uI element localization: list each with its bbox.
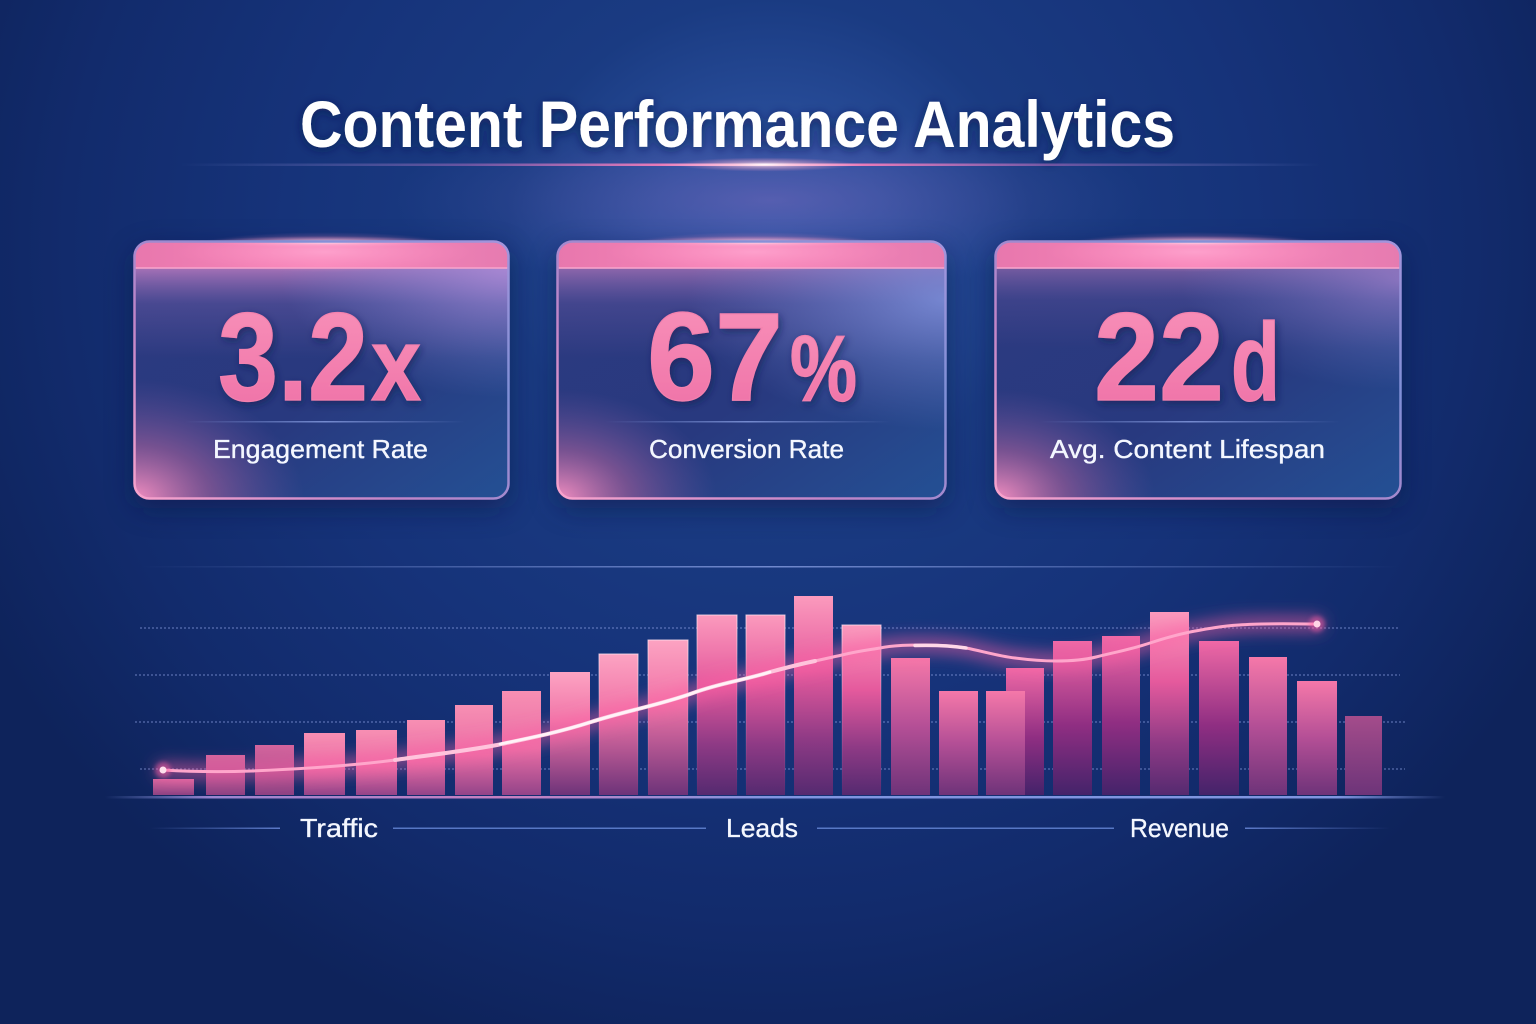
axis label: revenue: Revenue <box>1130 813 1229 843</box>
trend start point <box>155 762 171 778</box>
panel: conversion rate <box>547 234 957 518</box>
trend line <box>163 624 1317 772</box>
card header band <box>134 241 509 268</box>
title underline glow <box>180 158 1320 172</box>
metric value: d <box>1231 301 1280 424</box>
card header band <box>557 241 946 268</box>
metric value <box>647 288 857 427</box>
bars <box>153 596 1382 795</box>
chart <box>105 566 1445 843</box>
card header band <box>995 241 1401 268</box>
axis label: leads: Leads <box>726 813 798 843</box>
panel: engagement rate <box>128 233 518 518</box>
axis label: traffic: Traffic <box>300 813 378 843</box>
metric value: % <box>790 316 857 421</box>
metric value: x <box>371 307 421 423</box>
trend end point <box>1309 616 1325 632</box>
metric value: 67 <box>647 288 783 427</box>
metric label: Conversion Rate <box>649 434 844 464</box>
panel: average content lifespan <box>984 233 1408 518</box>
metric label: Engagement Rate <box>213 434 428 464</box>
chart baseline <box>105 796 1445 798</box>
title: Content Performance Analytics <box>300 87 1175 161</box>
metric value: 3.2 <box>218 288 368 427</box>
metric label: Avg. Content Lifespan <box>1050 434 1325 464</box>
metric value: 22 <box>1094 288 1224 427</box>
